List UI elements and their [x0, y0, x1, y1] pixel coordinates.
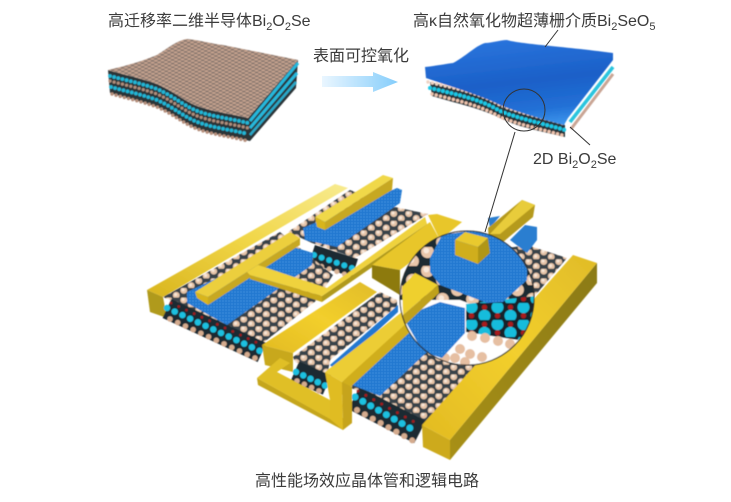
title: high-k native oxide dielectric: 高κ自然氧化物超薄栅介质Bi [413, 13, 611, 30]
title: high-mobility 2D semiconductor: 2 [266, 21, 272, 33]
magnified view circle [395, 225, 540, 367]
caption: 高性能场效应晶体管和逻辑电路 [255, 471, 479, 490]
label: 2D Bi2O2Se: 2 [572, 159, 578, 171]
transistor: top left [147, 175, 428, 318]
zoom circle on stack [503, 89, 545, 131]
arrow label: 表面可控氧化 [313, 47, 409, 65]
illustration: oxide-covered stack [425, 40, 613, 137]
transistor: middle left [163, 232, 333, 359]
transistor: right with large source bar [345, 200, 597, 460]
gate interconnect [247, 217, 427, 302]
device array: transistors and logic circuit [147, 175, 597, 460]
label: 2D Bi2O2Se: 2D Bi [533, 151, 572, 168]
label: 2D Bi2O2Se: 2 [591, 159, 597, 171]
title: high-mobility 2D semiconductor: O [272, 13, 285, 30]
label: 2D Bi2O2Se [533, 151, 616, 171]
illustration: layered Bi2O2Se stack [108, 39, 298, 141]
title: high-k native oxide dielectric [413, 12, 656, 33]
leader line to magnified view [485, 132, 515, 232]
leader line: oxide [545, 30, 558, 47]
transistor: lower left with feedback loop [257, 282, 415, 430]
magnified blue oxide, upper [430, 228, 527, 303]
title: high-mobility 2D semiconductor [108, 12, 311, 33]
magnified gate far [455, 232, 490, 264]
arrow: surface oxidation [322, 72, 398, 92]
magnified blue oxide, lower [403, 302, 465, 358]
title: high-k native oxide dielectric: SeO [617, 13, 649, 30]
magnified lower atoms [440, 331, 515, 367]
title: high-mobility 2D semiconductor: 高迁移率二维半导体Bi [108, 13, 266, 30]
magnified gate near [402, 273, 439, 327]
magnified lattice surface [400, 230, 534, 304]
leader line: 2D layer [570, 127, 590, 145]
title: high-k native oxide dielectric: 5 [649, 21, 656, 33]
title: high-mobility 2D semiconductor: 2 [285, 21, 291, 33]
label: 2D Bi2O2Se: Se [597, 151, 616, 168]
title: high-k native oxide dielectric: 2 [611, 21, 617, 33]
label: 2D Bi2O2Se: O [578, 151, 591, 168]
title: high-mobility 2D semiconductor: Se [291, 13, 311, 30]
magnified lattice edge [466, 296, 535, 340]
